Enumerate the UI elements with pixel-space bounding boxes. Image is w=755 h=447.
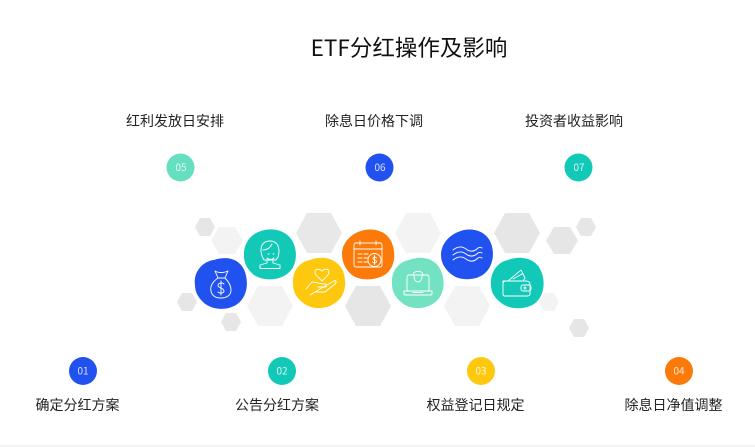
- heading: 除息日价格下调: 除息日价格下调: [325, 111, 423, 131]
- hexagon background cluster: [177, 213, 596, 337]
- step badge 01: [69, 357, 97, 385]
- icon: person on teal blob: [244, 229, 296, 279]
- icon: wallet on teal blob: [491, 258, 544, 308]
- step badge 05: [166, 154, 194, 182]
- label: 除息日净值调整: 除息日净值调整: [624, 395, 722, 415]
- icon: waves on blue blob: [441, 229, 493, 279]
- heading: 投资者收益影响: 投资者收益影响: [525, 111, 623, 131]
- step badge 02: 02: [276, 362, 288, 378]
- icon: hand holding heart on yellow blob: [293, 258, 345, 308]
- step badge 04: [665, 357, 693, 385]
- step badge 02: [268, 357, 296, 385]
- step badge 06: 06: [374, 159, 386, 174]
- label: 权益登记日规定: 权益登记日规定: [426, 395, 524, 415]
- step badge 03: [467, 357, 495, 385]
- step badge 06: [366, 154, 394, 182]
- step badge 07: 07: [573, 159, 585, 174]
- heading: 红利发放日安排: 红利发放日安排: [126, 111, 224, 131]
- label: 确定分红方案: 确定分红方案: [36, 395, 120, 415]
- step badge 04: 04: [673, 362, 685, 378]
- title: ETF分红操作及影响: [311, 31, 507, 63]
- icon: laptop bag on mint blob: [392, 258, 444, 308]
- label: 公告分红方案: 公告分红方案: [235, 395, 319, 415]
- icon: money bag on blue blob: [195, 258, 247, 309]
- step badge 03: 03: [475, 362, 487, 378]
- step badge 01: 01: [77, 362, 89, 378]
- step badge 05: 05: [175, 159, 187, 174]
- icon: calendar with coin on orange blob: [342, 229, 394, 279]
- step badge 07: [564, 154, 592, 182]
